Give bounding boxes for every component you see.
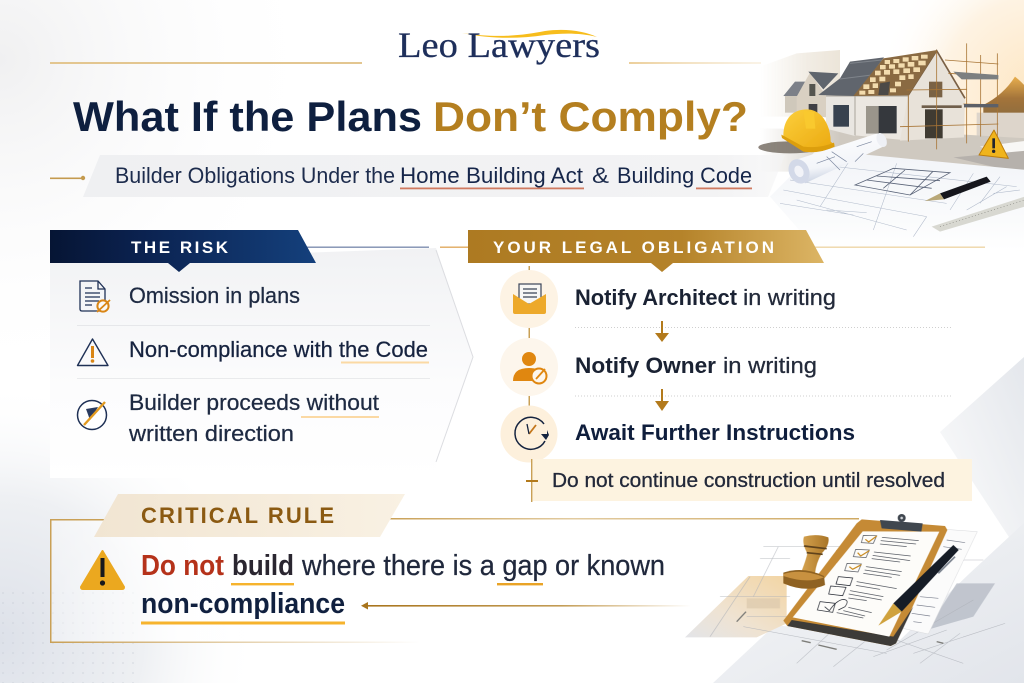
pen xyxy=(925,177,991,201)
helmet shadow xyxy=(758,141,822,153)
icon: clock step xyxy=(500,406,558,462)
back sheet xyxy=(903,529,977,634)
illustration: clipboard with stamp and pen xyxy=(685,514,1005,667)
checklist rows xyxy=(817,535,919,618)
checklist paper xyxy=(793,531,939,637)
text: notify owner: in writing xyxy=(723,353,817,378)
scaffolding xyxy=(900,43,998,149)
text: notify owner: Notify Owner xyxy=(575,353,716,378)
helmet xyxy=(781,109,835,152)
text: builder proceeds without written direction: Builder proceeds without xyxy=(129,390,379,415)
main house walls xyxy=(826,51,965,141)
text: await further instructions: Await Further Instructions xyxy=(575,420,855,445)
subtitle arrow xyxy=(50,176,85,180)
header rule left xyxy=(50,62,362,64)
background houses xyxy=(783,72,838,117)
ruler xyxy=(932,196,1024,232)
text: critical rule statement: non-compliance xyxy=(141,588,345,620)
icon: document with prohibition xyxy=(80,281,110,312)
text: omission in plans: Omission in plans xyxy=(129,283,300,308)
subtitle band: & xyxy=(592,163,609,188)
subtitle band: Building Code xyxy=(617,163,752,188)
heading: the risk banner xyxy=(50,230,316,272)
icon: compass struck through xyxy=(78,400,106,430)
subtitle band: Builder Obligations Under the xyxy=(115,163,395,188)
text: critical rule statement xyxy=(141,550,665,624)
icon: warning triangle xyxy=(78,339,108,366)
subtitle band: Home Building Act xyxy=(400,163,583,188)
icon: envelope step xyxy=(500,270,558,328)
heading: legal obligation banner xyxy=(468,230,824,272)
text: critical rule statement: build xyxy=(232,550,294,582)
panel: the risk xyxy=(50,230,473,478)
panel: your legal obligation xyxy=(468,230,985,502)
text: non-compliance with the code: Non-compliance with the Code xyxy=(129,337,428,362)
subtitle band xyxy=(83,155,785,197)
title xyxy=(73,93,748,140)
header rule right xyxy=(629,62,761,64)
text: notify architect: Notify Architect xyxy=(575,285,738,310)
clip xyxy=(880,514,923,532)
main house roofs xyxy=(818,50,937,96)
stamp xyxy=(783,535,829,589)
illustration: house under construction with plans xyxy=(758,43,1024,250)
rolled plan xyxy=(785,131,889,187)
heading: critical rule tag: CRITICAL RULE xyxy=(141,503,334,528)
text: notify owner xyxy=(575,353,817,378)
icon: warning triangle xyxy=(81,551,124,589)
callout: do not continue construction xyxy=(526,459,972,502)
arrow: architect to owner xyxy=(655,321,669,342)
text: critical rule statement: Do not xyxy=(141,550,224,582)
text: critical rule statement: where there is a gap or known xyxy=(301,550,665,582)
heading: the risk banner: THE RISK xyxy=(131,238,229,257)
heading: critical rule tag xyxy=(94,494,405,537)
windows xyxy=(833,82,962,138)
clipboard board xyxy=(783,519,947,646)
title: What If the Plans xyxy=(73,93,422,140)
blueprint sheet xyxy=(770,150,1024,250)
title: Don’t Comply? xyxy=(433,93,748,140)
logo: Leo Lawyers: Leo Lawyers xyxy=(398,25,600,65)
icon: owner step xyxy=(500,338,558,396)
warning sign xyxy=(979,130,1008,158)
text: builder proceeds without written direction xyxy=(128,390,379,446)
arrow: pointing to non-compliance xyxy=(361,602,691,610)
panel: critical rule xyxy=(50,494,859,643)
text: builder proceeds without written direction: written direction xyxy=(128,421,294,446)
arrow: owner to instructions xyxy=(655,389,669,411)
plan sheets xyxy=(685,547,1005,667)
heading: legal obligation banner: YOUR LEGAL OBLIGATION xyxy=(493,238,774,257)
callout: do not continue construction: Do not continue construction until resolved xyxy=(552,470,945,492)
pen xyxy=(878,545,959,626)
text: notify architect xyxy=(575,285,836,310)
text: notify architect: in writing xyxy=(743,285,836,310)
